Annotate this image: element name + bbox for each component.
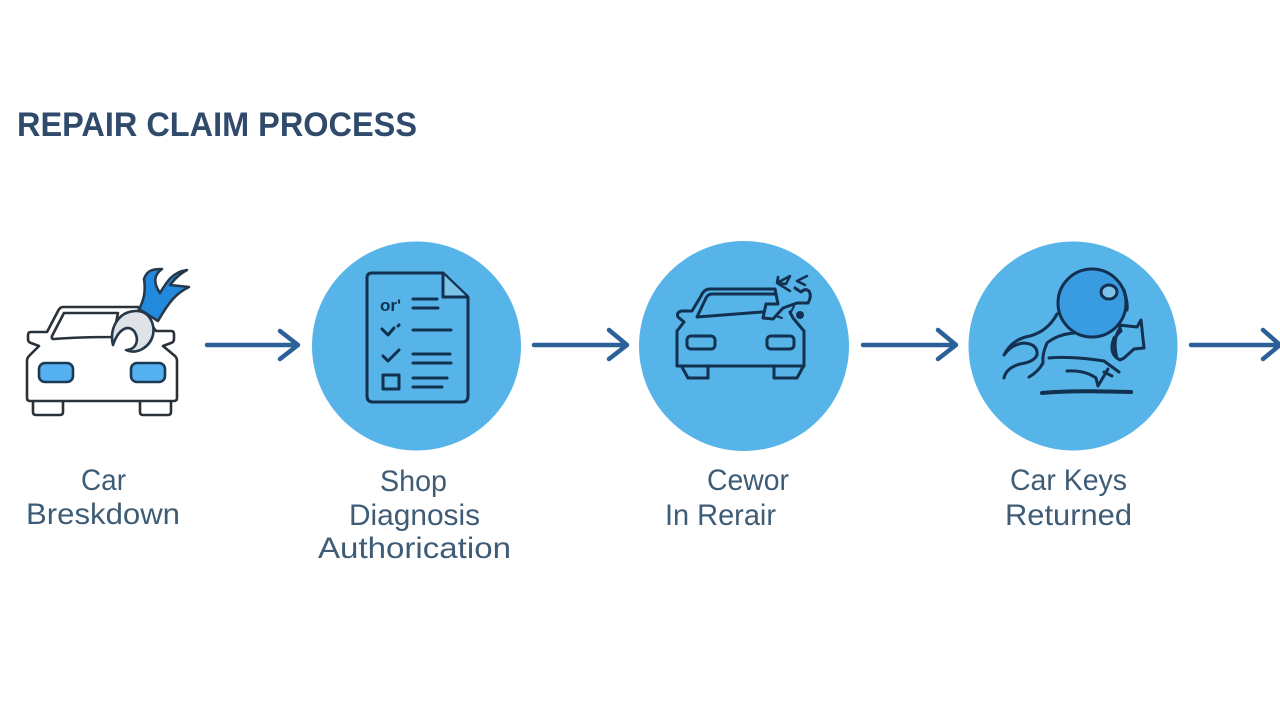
step 1: car breakdown icon (27, 269, 189, 415)
debris dot (796, 311, 804, 319)
label: car breakdown: Car (81, 464, 126, 497)
label: in repair (665, 464, 789, 532)
label: in repair: Cewor (707, 464, 789, 497)
headlights (39, 363, 165, 382)
label: shop diagnosis authorication: Diagnosis (349, 499, 480, 532)
arrow 2 (534, 330, 627, 359)
circle (968, 242, 1178, 450)
document icon (367, 273, 468, 402)
step 2: shop diagnosis circle (312, 242, 521, 450)
arrow 1 (207, 331, 298, 359)
label: shop diagnosis authorication: Authorication (318, 532, 511, 565)
label: car keys returned (1005, 464, 1132, 532)
checklist mark: or' (380, 296, 401, 315)
label: car breakdown: Breskdown (26, 498, 180, 531)
label: car keys returned: Car Keys (1010, 464, 1127, 497)
wrench (112, 269, 189, 352)
label: in repair: In Rerair (665, 499, 776, 532)
label: shop diagnosis authorication (318, 465, 511, 565)
step 3: in repair circle (639, 241, 849, 451)
label: car keys returned: Returned (1005, 499, 1132, 532)
circle (639, 241, 849, 451)
step 4: car keys returned circle (968, 242, 1178, 450)
label: shop diagnosis authorication: Shop (380, 465, 447, 498)
damaged car icon (677, 276, 810, 378)
key fob icon (1004, 269, 1144, 393)
car body (27, 307, 177, 415)
title: REPAIR CLAIM PROCESS (17, 106, 417, 144)
circle (312, 242, 521, 450)
label: car breakdown (26, 464, 180, 531)
arrow 4 (1191, 330, 1280, 359)
arrow 3 (863, 330, 956, 359)
